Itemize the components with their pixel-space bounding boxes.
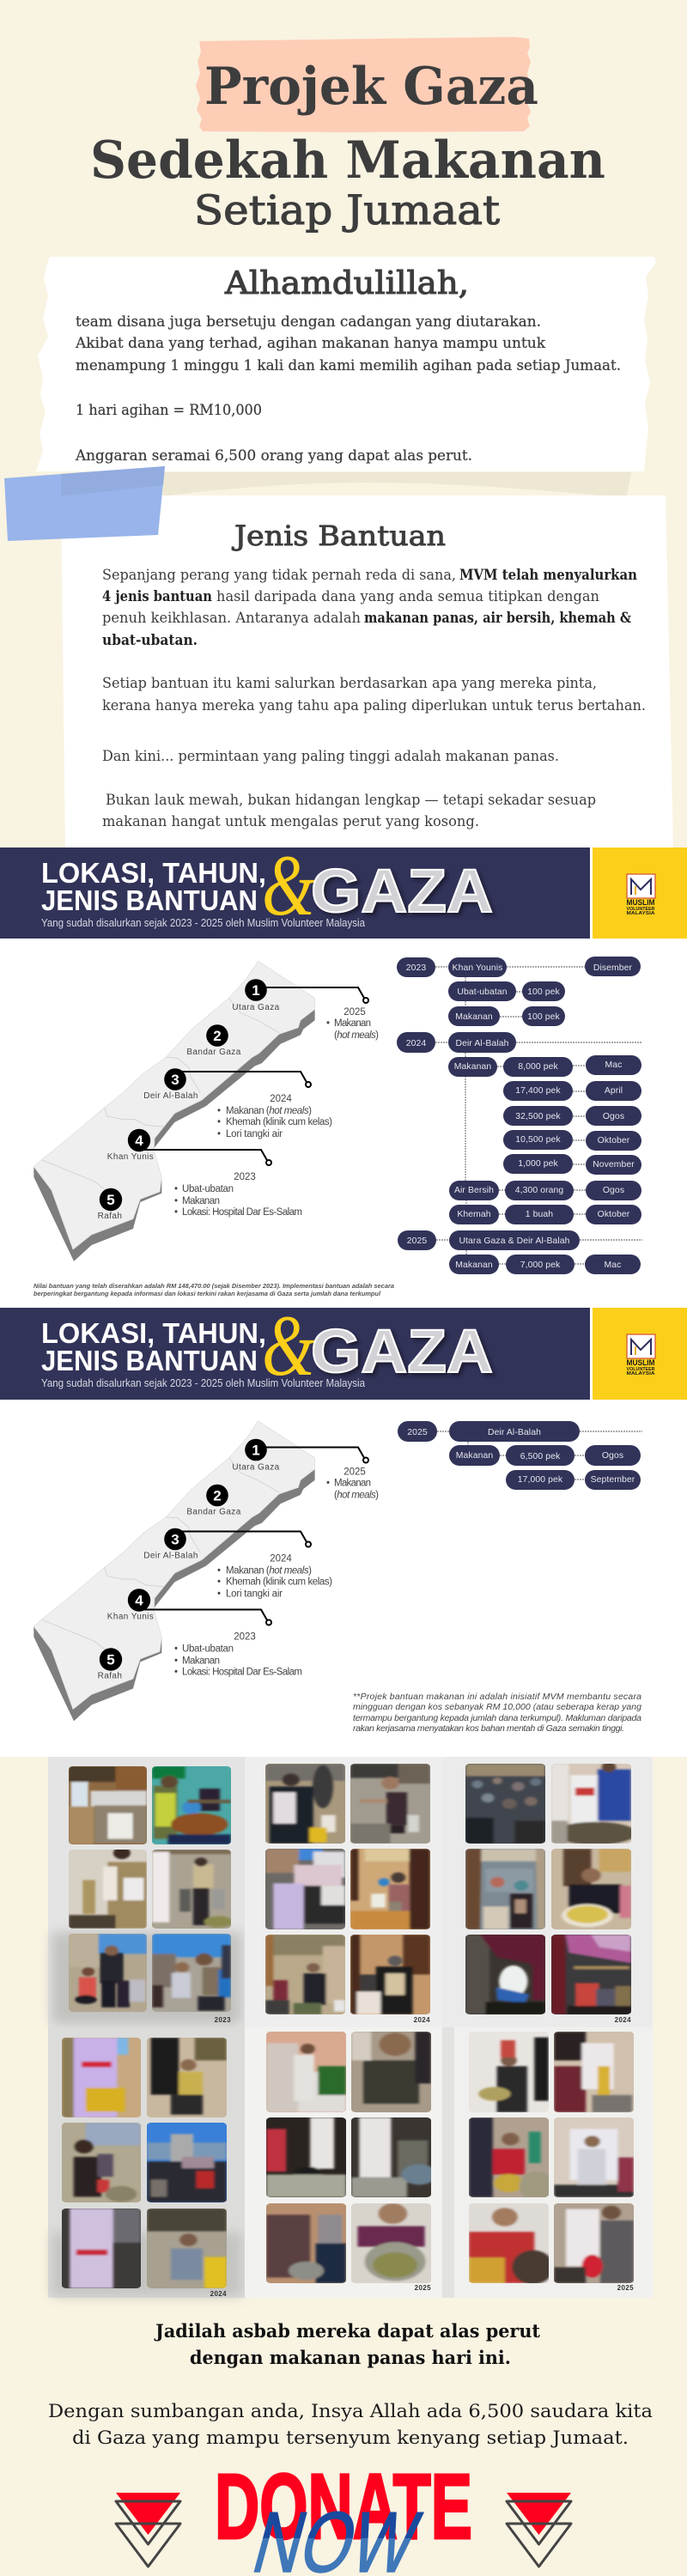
list 2024: 2024	[270, 1094, 292, 1104]
list 2025: 2025	[344, 1007, 366, 1018]
banner: lokasi, tahun, jenis bantuan (first)	[0, 837, 687, 939]
text block: paragraphs: ubat-ubatan.	[102, 632, 198, 648]
photo: boy preparing food	[350, 1849, 430, 1929]
map shape	[33, 1421, 315, 1721]
row 2024 Deir Al-Balah: 1 buah	[526, 1210, 553, 1219]
footnote: aid value: Nilai bantuan yang telah diserahkan adalah RM 148,470.00 (sejak Disember 2023). Implementasi bantuan adalah secara	[33, 1284, 394, 1290]
row 2023 Khan Younis: 100 pek	[527, 987, 561, 997]
list 2025: Makanan	[334, 1479, 371, 1489]
marker 3: Deir Al-Balah	[143, 1528, 198, 1561]
year label: 2024	[210, 2290, 227, 2298]
list 2024: •	[217, 1566, 221, 1577]
row 2025 Deir Al-Balah: Ogos	[602, 1451, 623, 1461]
logo: Muslim Volunteer Malaysia: MALAYSIA	[627, 1371, 655, 1376]
photo: volunteers with vegetables	[266, 2032, 346, 2112]
call to action: supporting text: di Gaza yang mampu tersenyum kenyang setiap Jumaat.	[72, 2427, 629, 2448]
photo: air bersih banner	[62, 2208, 141, 2288]
text block: explanation: menampung 1 minggu 1 kali dan kami memilih agihan pada setiap Jumaat.	[76, 357, 621, 374]
photo: crowd in doorway	[465, 1849, 545, 1929]
text block: explanation	[75, 313, 621, 464]
photo: women with pot	[266, 2203, 346, 2283]
call to action: supporting text	[48, 2401, 653, 2448]
banner heading	[41, 1317, 266, 1376]
text block: paragraphs: makanan hangat untuk mengalas perut yang kosong.	[102, 813, 479, 829]
year label: 2025	[617, 2284, 634, 2292]
marker 2: Bandar Gaza	[186, 1024, 241, 1057]
list 2023: Lokasi: Hospital Dar Es-Salam	[182, 1207, 302, 1218]
photo: cooking in pot	[69, 1850, 147, 1929]
row 2025 Utara Gaza and Deir Al-Balah: Makanan	[455, 1261, 493, 1270]
photo: tent interior	[551, 1935, 631, 2014]
list 2024: 2024	[270, 1554, 292, 1564]
list 2023: Makanan	[182, 1656, 220, 1666]
text block: explanation: Akibat dana yang terhad, agihan makanan hanya mampu untuk	[75, 335, 546, 351]
list 2024: •	[217, 1106, 221, 1116]
list 2023	[174, 1172, 302, 1218]
row 2024 Deir Al-Balah: Mac	[605, 1060, 622, 1070]
photo: banner and fish	[551, 1764, 631, 1844]
year label: 2023	[215, 2016, 231, 2024]
photo: crowd	[465, 1764, 545, 1844]
marker 4: Khan Yunis: Khan Yunis	[107, 1152, 154, 1162]
row 2024 Deir Al-Balah: 17,400 pek	[515, 1086, 561, 1096]
banner heading: JENIS BANTUAN	[41, 884, 258, 916]
row 2023 Khan Younis: Disember	[593, 963, 633, 973]
text block: paragraphs: penuh keikhlasan. Antaranya adalah	[102, 610, 361, 626]
text block: paragraphs: Setiap bantuan itu kami salurkan berdasarkan apa yang mereka pinta,	[102, 675, 597, 691]
list 2024: •	[217, 1577, 221, 1587]
panel: photo collage 2025 (a)	[245, 2027, 442, 2298]
photo: volunteer and boy	[152, 1934, 231, 2012]
list 2024: Lori tangki air	[226, 1129, 283, 1139]
row 2023 Khan Younis: Khan Younis	[453, 963, 502, 973]
marker 1: Utara Gaza	[232, 979, 280, 1012]
marker 2: Bandar Gaza: Bandar Gaza	[186, 1508, 241, 1516]
row 2024 Deir Al-Balah: Oktober	[598, 1210, 630, 1219]
marker 3: Deir Al-Balah: Deir Al-Balah	[143, 1551, 198, 1561]
photo: boy with soup pot	[351, 2203, 431, 2283]
logo: Muslim Volunteer Malaysia: MALAYSIA	[627, 911, 655, 916]
marker 5: Rafah: 5	[106, 1652, 115, 1668]
row 2024 Deir Al-Balah: Deir Al-Balah	[456, 1039, 509, 1048]
photo: volunteer and woman	[152, 1766, 231, 1844]
blue tape	[4, 466, 165, 541]
row 2024 Deir Al-Balah: Air Bersih	[454, 1186, 494, 1195]
marker 1: Utara Gaza: Utara Gaza	[232, 1003, 280, 1012]
row 2023 Khan Younis: 2023	[406, 963, 426, 973]
list 2024: •	[217, 1589, 221, 1599]
row 2024 Deir Al-Balah: 2024	[406, 1039, 426, 1048]
flow chart: distribution timeline (second)	[398, 1421, 642, 1490]
marker 5: Rafah	[98, 1648, 122, 1681]
marker 1: Utara Gaza: Utara Gaza	[232, 1463, 280, 1472]
connectors	[437, 1431, 642, 1479]
banner heading: LOKASI, TAHUN,	[41, 1317, 266, 1349]
logo: Muslim Volunteer Malaysia: MUSLIM	[627, 1358, 654, 1367]
list 2023: •	[174, 1656, 178, 1666]
connectors	[435, 967, 642, 1264]
row 2024 Deir Al-Balah: 32,500 pek	[515, 1112, 561, 1121]
marker 3: Deir Al-Balah	[143, 1068, 198, 1101]
heading: Alhamdulillah: Alhamdulillah,	[224, 266, 469, 301]
row 2025 Utara Gaza and Deir Al-Balah: Mac	[605, 1261, 621, 1270]
decorative beige strip	[163, 472, 631, 496]
word GAZA: GAZA	[311, 1318, 493, 1386]
note: project explanation: mingguan dengan kos sebanyak RM 10,000 (atau seberapa kerap yang	[353, 1702, 641, 1712]
photo: children with bowls	[69, 1934, 147, 2012]
list 2024: Khemah (klinik cum kelas)	[226, 1577, 332, 1587]
row 2025 Utara Gaza and Deir Al-Balah: Utara Gaza & Deir Al-Balah	[459, 1236, 570, 1246]
photo: man in kitchen	[265, 1935, 345, 2014]
list 2024: Makanan (hot meals)	[226, 1106, 312, 1116]
list 2023: Ubat-ubatan	[182, 1184, 234, 1194]
list 2025	[326, 1467, 379, 1501]
marker 4: Khan Yunis: Khan Yunis	[107, 1613, 154, 1621]
logo: Muslim Volunteer Malaysia	[627, 874, 655, 916]
list 2023: •	[174, 1196, 178, 1206]
panel: Alhamdulillah torn paper	[36, 257, 656, 471]
list 2023: •	[174, 1207, 178, 1218]
list 2025: •	[326, 1018, 330, 1029]
marker 5: Rafah: Rafah	[98, 1212, 122, 1221]
list 2024: Makanan (hot meals)	[226, 1566, 312, 1577]
row 2025 Deir Al-Balah: 17,000 pek	[518, 1475, 563, 1485]
panel: photo collage 2024 (b)	[442, 1757, 653, 2027]
row 2024 Deir Al-Balah: 1,000 pek	[518, 1159, 558, 1169]
photo: damaged tent	[465, 1935, 545, 2014]
marker 4: Khan Yunis: 4	[135, 1592, 143, 1609]
marker 5: Rafah: Rafah	[98, 1671, 122, 1681]
photo: crowd under blue sky	[147, 2123, 227, 2202]
text block: paragraphs: makanan panas, air bersih, khemah &	[364, 610, 631, 626]
list 2023: Lokasi: Hospital Dar Es-Salam	[182, 1668, 302, 1678]
title: Projek Gaza: Projek Gaza	[204, 57, 538, 117]
photo: boy in red jacket	[469, 2203, 549, 2283]
list 2025: (hot meals)	[334, 1491, 379, 1501]
marker 4: Khan Yunis	[107, 1129, 154, 1162]
marker 2: Bandar Gaza: 2	[213, 1487, 222, 1504]
banner heading: LOKASI, TAHUN,	[41, 857, 266, 889]
call to action: bold text	[154, 2320, 540, 2368]
leader lines	[142, 987, 368, 1165]
peach highlight behind title	[196, 37, 531, 132]
heading: Jenis Bantuan: Jenis Bantuan	[232, 519, 446, 552]
photo: girl with noodles	[554, 2032, 634, 2112]
logo: Muslim Volunteer Malaysia	[627, 1334, 655, 1376]
row 2025 Deir Al-Balah: 6,500 pek	[520, 1452, 561, 1461]
marker 2: Bandar Gaza: Bandar Gaza	[186, 1048, 241, 1057]
list 2025: (hot meals)	[334, 1030, 379, 1041]
text block: paragraphs: Bukan lauk mewah, bukan hidangan lengkap — tetapi sekadar sesuap	[106, 792, 596, 808]
photo: boys with banner	[554, 2117, 634, 2197]
row 2024 Deir Al-Balah: Ogos	[603, 1186, 624, 1195]
marker 2: Bandar Gaza	[186, 1485, 241, 1516]
list 2024	[217, 1554, 332, 1599]
row 2024 Deir Al-Balah: April	[605, 1086, 623, 1096]
banner heading	[41, 857, 266, 916]
ampersand: &	[262, 837, 315, 934]
list 2023	[174, 1631, 302, 1678]
word GAZA: GAZA	[311, 858, 493, 926]
photo: boy with water cans	[147, 2208, 227, 2288]
marker 4: Khan Yunis: 4	[135, 1133, 143, 1149]
text block: explanation: Anggaran seramai 6,500 orang yang dapat alas perut.	[75, 447, 472, 464]
list 2024: Lori tangki air	[226, 1589, 283, 1599]
note: project explanation	[353, 1692, 641, 1734]
list 2023: Makanan	[182, 1196, 220, 1206]
photo: boy with bowl	[351, 2117, 431, 2197]
logo: Muslim Volunteer Malaysia: MUSLIM	[627, 898, 654, 907]
icon: right triangles	[507, 2493, 571, 2567]
panel: photo collage 2024 (a)	[245, 1757, 442, 2027]
footnote: aid value: berperingkat bergantung kepada informasi dan lokasi terkini rakan kerjasama di Gaza serta jumlah dana terkumpul	[33, 1291, 381, 1297]
header block	[90, 37, 605, 234]
marker 5: Rafah: 5	[106, 1192, 115, 1208]
year label: 2025	[415, 2284, 431, 2292]
photo: water containers at truck	[265, 1764, 345, 1844]
photo: boy with container	[350, 1764, 430, 1844]
photo: volunteer back view	[350, 1935, 430, 2014]
text block: paragraphs: Dan kini... permintaan yang paling tinggi adalah makanan panas.	[102, 748, 559, 764]
text block: paragraphs: hasil daripada dana yang anda semua titipkan dengan	[216, 588, 599, 605]
row 2025 Utara Gaza and Deir Al-Balah: 2025	[407, 1236, 427, 1246]
photo: truck with banners	[265, 1849, 345, 1929]
text block: explanation: 1 hari agihan = RM10,000	[76, 402, 262, 418]
list 2025: •	[326, 1479, 330, 1489]
photo: man stirring pots	[152, 1850, 231, 1929]
logo: Muslim Volunteer Malaysia: VOLUNTEER	[627, 1367, 655, 1372]
list 2023: Ubat-ubatan	[182, 1643, 234, 1654]
panel: photo collage 2023	[48, 1757, 245, 2027]
marker 5: Rafah	[98, 1188, 122, 1221]
photo: girl in red	[469, 2117, 549, 2197]
call to action: bold text: Jadilah asbab mereka dapat alas perut	[154, 2320, 540, 2342]
flow chart: distribution timeline (first)	[397, 957, 642, 1274]
row 2024 Deir Al-Balah: Khemah	[457, 1210, 491, 1219]
list 2025	[326, 1007, 379, 1041]
panel: photo collage 2024 (c)	[48, 2027, 245, 2298]
row 2024 Deir Al-Balah: Oktober	[598, 1136, 630, 1145]
note: project explanation: **Projek bantuan makanan ini adalah inisiatif MVM membantu secara	[353, 1692, 641, 1702]
text block: paragraphs	[102, 567, 646, 829]
row 2023 Khan Younis: Ubat-ubatan	[457, 987, 508, 997]
row 2023 Khan Younis: Makanan	[455, 1012, 493, 1022]
marker 3: Deir Al-Balah: 3	[171, 1532, 179, 1547]
list 2024: •	[217, 1117, 221, 1127]
photo: hot meals banner and boys	[62, 2038, 141, 2117]
list 2025: 2025	[344, 1467, 366, 1477]
text block: explanation: team disana juga bersetuju dengan cadangan yang diutarakan.	[76, 313, 541, 330]
list 2023: •	[174, 1668, 178, 1678]
list 2023: •	[174, 1184, 178, 1194]
photo: boy thumbs up with noodles	[551, 1849, 631, 1929]
photo: boys at kitchen	[469, 2032, 549, 2112]
banner subtitle: Yang sudah disalurkan sejak 2023 - 2025 oleh Muslim Volunteer Malaysia	[41, 917, 365, 929]
photo: girl with pot	[266, 2117, 346, 2197]
row 2024 Deir Al-Balah: Ogos	[603, 1112, 624, 1121]
title: Setiap Jumaat: Setiap Jumaat	[194, 187, 500, 234]
call to action: supporting text: Dengan sumbangan anda, Insya Allah ada 6,500 saudara kita	[48, 2401, 653, 2421]
white section background	[0, 848, 687, 1757]
row 2025 Utara Gaza and Deir Al-Balah: 7,000 pek	[520, 1261, 561, 1270]
map: Gaza strip with locations (second)	[33, 1421, 379, 1721]
row 2025 Deir Al-Balah: Makanan	[456, 1451, 493, 1461]
list 2023: 2023	[234, 1631, 256, 1642]
text block: paragraphs: 4 jenis bantuan	[102, 588, 212, 605]
banner: lokasi, tahun, jenis bantuan (second)	[0, 1297, 687, 1400]
marker 4: Khan Yunis	[107, 1589, 154, 1621]
panel: Jenis Bantuan	[61, 495, 673, 848]
note: project explanation: rakan kerjasama menyatakan kos bahan mentah di Gaza semakin tinggi.	[353, 1723, 624, 1734]
row 2023 Khan Younis: 100 pek	[527, 1012, 561, 1022]
photo: boy in dark shirt	[351, 2032, 431, 2112]
list 2024	[217, 1094, 332, 1139]
photo: man with plate and banner	[554, 2203, 634, 2283]
row 2024 Deir Al-Balah: 10,500 pek	[515, 1135, 561, 1145]
list 2024: Khemah (klinik cum kelas)	[226, 1117, 332, 1127]
year label: 2024	[414, 2016, 430, 2024]
panel: photo collage 2025 (b)	[442, 2027, 653, 2298]
text block: paragraphs: MVM telah menyalurkan	[459, 567, 637, 583]
marker 2: Bandar Gaza: 2	[213, 1028, 222, 1044]
list 2024: •	[217, 1129, 221, 1139]
footnote: aid value	[33, 1284, 394, 1297]
row 2024 Deir Al-Balah	[397, 1032, 641, 1224]
list 2023: 2023	[234, 1172, 256, 1182]
year label: 2024	[615, 2016, 631, 2024]
row 2023 Khan Younis	[397, 957, 641, 1026]
map: Gaza strip with locations (first)	[33, 961, 379, 1261]
marker 1: Utara Gaza	[232, 1439, 280, 1472]
row 2025 Deir Al-Balah: Deir Al-Balah	[488, 1428, 541, 1437]
photo: children with can	[62, 2123, 141, 2202]
row 2025 Utara Gaza and Deir Al-Balah	[398, 1230, 641, 1274]
text block: paragraphs: kerana hanya mereka yang tahu apa paling diperlukan untuk terus bertahan.	[102, 697, 646, 714]
row 2025 Deir Al-Balah: September	[591, 1475, 635, 1485]
row 2024 Deir Al-Balah: November	[593, 1160, 635, 1170]
row 2024 Deir Al-Balah: Makanan	[454, 1062, 491, 1072]
word DONATE: DONATE	[215, 2454, 472, 2558]
ampersand: &	[262, 1297, 315, 1394]
text block: paragraphs: Sepanjang perang yang tidak pernah reda di sana,	[102, 567, 456, 583]
leader lines	[142, 1448, 368, 1625]
row 2025 Deir Al-Balah	[398, 1421, 641, 1490]
call to action: bold text: dengan makanan panas hari ini.	[190, 2347, 511, 2368]
marker 1: Utara Gaza: 1	[252, 982, 260, 999]
note: project explanation: termampu bergantung kepada jumlah dana terkumpul). Makluman daripada	[353, 1713, 641, 1723]
photo: boxes of supplies	[69, 1766, 147, 1844]
list 2023: •	[174, 1643, 178, 1654]
title: Sedekah Makanan: Sedekah Makanan	[90, 131, 605, 191]
row 2024 Deir Al-Balah: 8,000 pek	[518, 1062, 558, 1072]
map shape	[33, 961, 315, 1261]
row 2025 Deir Al-Balah: 2025	[407, 1428, 428, 1437]
list 2025: Makanan	[334, 1018, 371, 1029]
banner heading: JENIS BANTUAN	[41, 1345, 258, 1376]
icon: left triangles	[116, 2493, 180, 2567]
logo: Muslim Volunteer Malaysia: VOLUNTEER	[627, 907, 655, 912]
photo: girl with pot	[147, 2038, 227, 2117]
marker 3: Deir Al-Balah: Deir Al-Balah	[143, 1091, 198, 1101]
donate headline	[218, 2472, 471, 2573]
marker 1: Utara Gaza: 1	[252, 1443, 260, 1458]
banner subtitle: Yang sudah disalurkan sejak 2023 - 2025 oleh Muslim Volunteer Malaysia	[41, 1377, 365, 1389]
row 2024 Deir Al-Balah: 4,300 orang	[515, 1186, 563, 1195]
marker 3: Deir Al-Balah: 3	[171, 1072, 179, 1088]
